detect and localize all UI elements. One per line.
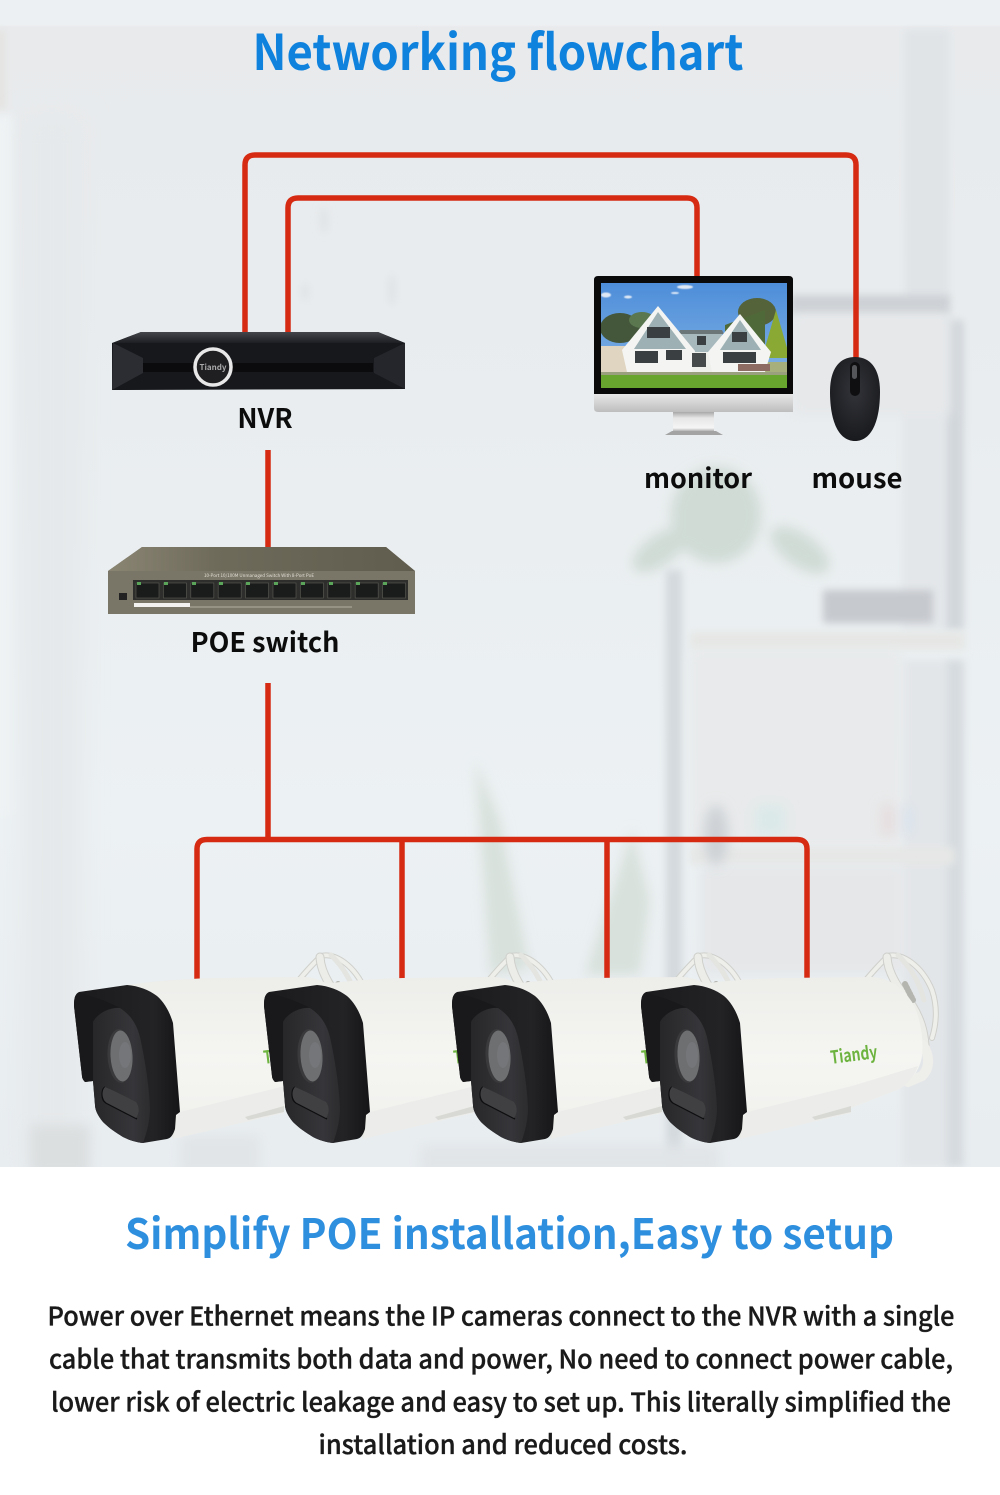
blurred plant xyxy=(625,467,837,583)
NVR power ring xyxy=(195,349,231,385)
description paragraph: lower risk of electric leakage and easy to set up. This literally simplified the xyxy=(51,1382,951,1420)
connector: NVR to mouse xyxy=(245,155,856,358)
label: NVR: NVR xyxy=(237,397,293,436)
connector: POE switch to camera bus xyxy=(265,683,271,840)
background room photo xyxy=(0,0,1000,1175)
icon: camera 2 xyxy=(264,955,559,1143)
description paragraph xyxy=(48,1296,954,1462)
mouse scroll wheel xyxy=(850,362,860,396)
title: Networking flowchart: Networking flowchart xyxy=(252,14,744,85)
description paragraph: installation and reduced costs. xyxy=(318,1425,688,1462)
icon: monitor xyxy=(594,276,793,435)
monitor screen: house photo xyxy=(600,283,790,388)
connector: camera bus xyxy=(197,840,807,980)
icon: POE switch xyxy=(108,547,415,614)
white lower panel xyxy=(0,1167,1000,1495)
label: monitor: monitor xyxy=(644,457,752,496)
label: mouse: mouse xyxy=(812,457,902,496)
connector: NVR to POE switch xyxy=(265,450,271,547)
icon: POE switch: 10-Port 10/100M Unmanaged Switch With 8-Port PoE xyxy=(204,572,314,579)
description paragraph: Power over Ethernet means the IP cameras connect to the NVR with a single xyxy=(48,1296,954,1334)
icon: camera 3 xyxy=(452,955,747,1143)
heading: Simplify POE installation: Simplify POE installation,Easy to setup xyxy=(125,1201,894,1262)
label: POE switch: POE switch xyxy=(191,621,339,660)
description paragraph: cable that transmits both data and power, No need to connect power cable, xyxy=(49,1340,953,1376)
icon: mouse xyxy=(830,357,880,441)
monitor bezel xyxy=(594,276,793,394)
connector: NVR to monitor xyxy=(288,198,697,332)
icon: NVR recorder xyxy=(112,332,405,390)
NVR logo: Tiandy xyxy=(199,362,227,373)
icon: camera 1 xyxy=(74,955,369,1143)
monitor chin xyxy=(594,394,793,412)
icon: camera 4 xyxy=(641,955,936,1143)
monitor stand xyxy=(665,412,723,435)
